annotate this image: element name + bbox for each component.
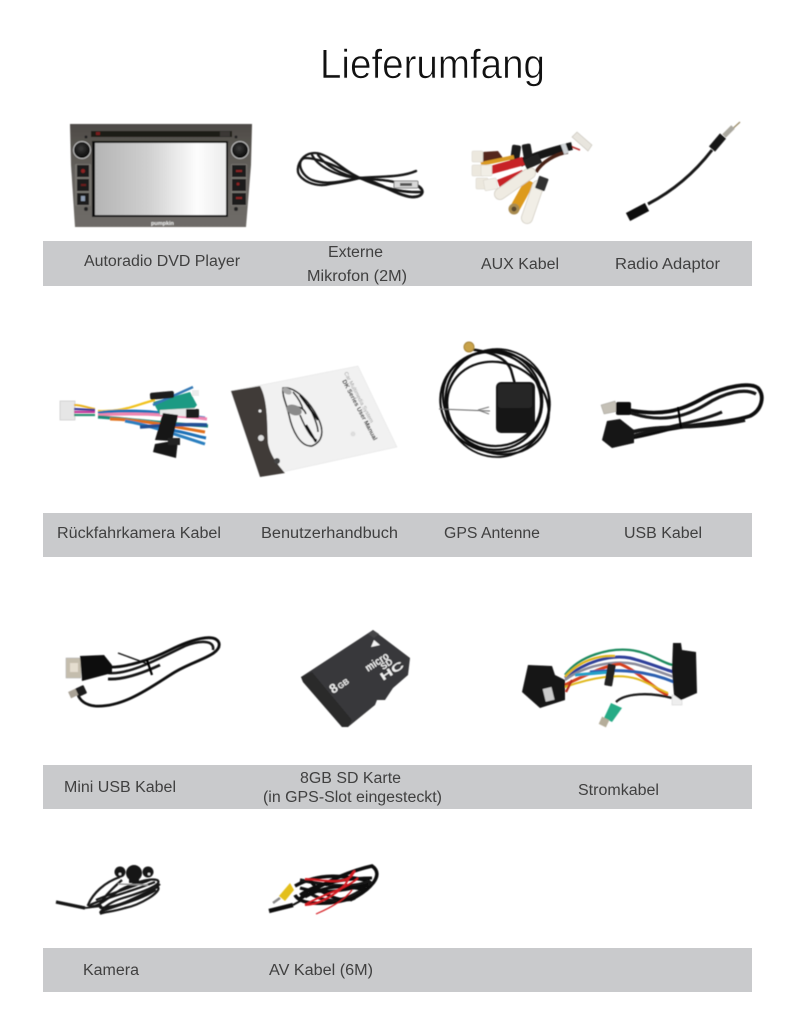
label bar: row 1 [43,241,752,286]
icon: AV cable [269,866,377,914]
icon: radio adaptor [628,122,740,217]
icon: external microphone cable [298,153,422,197]
icon: power cable harness [522,643,697,727]
label: Mini USB Kabel: Mini USB Kabel [64,779,176,796]
label: Externe Mikrofon (2M): Externe [328,244,383,261]
label: 8GB SD Karte: (in GPS-Slot eingesteckt) [263,789,442,806]
label bar: row 2 [43,513,752,557]
label: Autoradio DVD Player: Autoradio DVD Player [84,253,240,270]
label bar: row 3 [43,765,752,809]
icon: rear-view camera [56,865,160,914]
icon: user manual booklet: DK Series User Manual [340,379,378,442]
label: GPS Antenne: GPS Antenne [444,525,540,542]
icon: Autoradio DVD player: pumpkin [151,221,175,227]
icon: GPS antenna [426,334,564,471]
icon: mini USB cable [66,638,219,706]
icon: 8GB micro SD card: SD [379,656,395,672]
label: Rückfahrkamera Kabel: Rückfahrkamera Kabel [57,525,221,542]
label: USB Kabel: USB Kabel [624,525,702,542]
label: Kamera: Kamera [83,962,139,979]
manual title text: Car Multimedia System [342,371,374,425]
label: Radio Adaptor: Radio Adaptor [615,256,720,273]
icon: Autoradio DVD player [70,124,252,227]
label bar: row 4 [43,948,752,992]
label: Benutzerhandbuch: Benutzerhandbuch [261,525,398,542]
label: 8GB SD Karte: 8GB SD Karte [300,770,401,787]
icon: 8GB micro SD card: HC [378,659,407,684]
icon: reversing camera cable [60,387,208,458]
icon: AUX cable [472,132,592,218]
icon: user manual booklet [231,366,397,477]
icon: USB cable [601,385,762,448]
label: AV Kabel (6M): AV Kabel (6M) [269,962,373,979]
label: AUX Kabel: AUX Kabel [481,256,559,273]
icon: 8GB micro SD card [301,630,410,727]
label: Externe Mikrofon (2M): Mikrofon (2M) [307,268,407,285]
label: Stromkabel: Stromkabel [578,782,659,799]
title: Lieferumfang [320,41,545,87]
micro SD logo text: micro [363,650,392,675]
card capacity text: 8GB [326,673,352,696]
